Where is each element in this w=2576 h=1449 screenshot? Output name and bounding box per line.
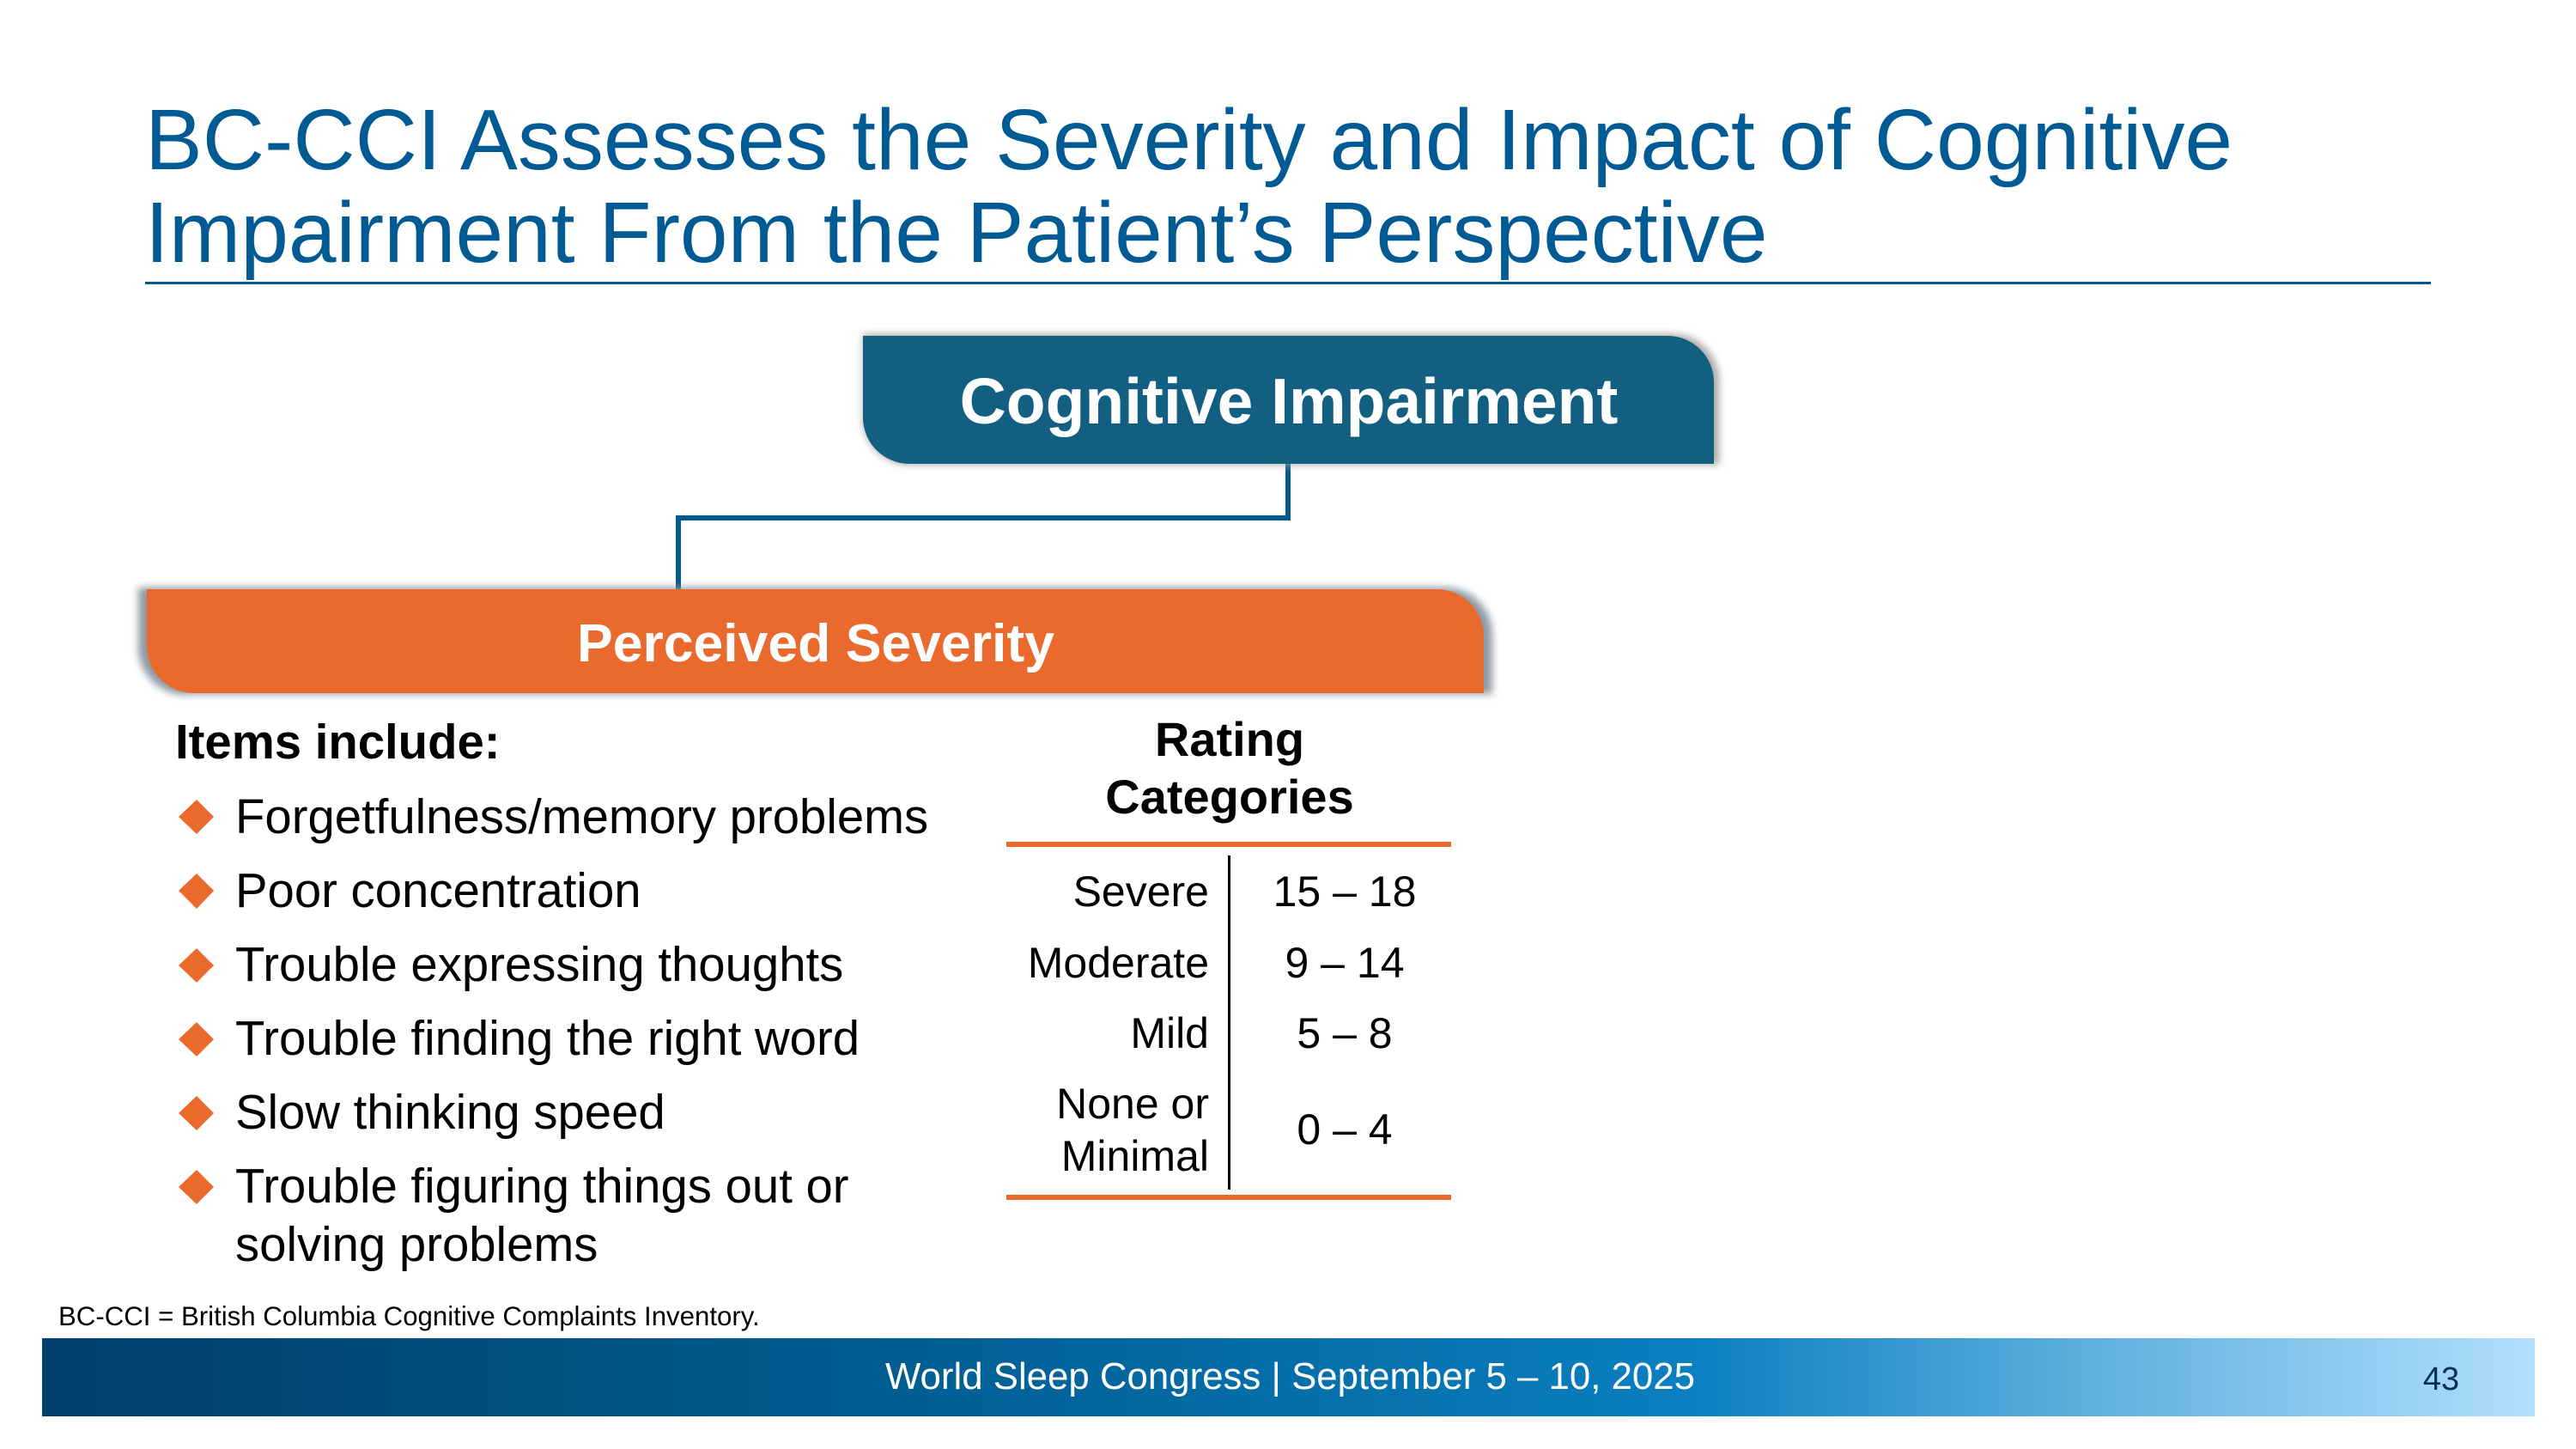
table score ranges: 15 – 18: [1273, 868, 1416, 916]
title: BC-CCI Assesses the Severity and Impact of Cognitive: [145, 92, 2233, 188]
box: Perceived Severity: [138, 588, 1492, 695]
box: Cognitive Impairment: [863, 334, 1719, 465]
rating categories table: [1006, 712, 1451, 1200]
title underline: [145, 282, 2431, 284]
table category labels: Minimal: [1061, 1132, 1209, 1180]
item: solving problems: solving problems: [235, 1217, 598, 1271]
table heading: Categories: [1105, 770, 1354, 824]
item: solving problems: Trouble figuring things out or: [235, 1159, 849, 1213]
footnote: BC-CCI = British Columbia Cognitive Complaints Inventory.: [58, 1301, 760, 1331]
connector: cognitive impairment to perceived severity: [678, 464, 1288, 590]
items list: [175, 715, 928, 1271]
table heading: [1105, 712, 1354, 824]
table score ranges: 9 – 14: [1285, 939, 1405, 987]
item: finding word: Trouble finding the right word: [235, 1011, 860, 1065]
title: Impairment From the Patient’s Perspective: [145, 185, 1768, 281]
box: Cognitive Impairment: Cognitive Impairment: [960, 365, 1618, 437]
footer bar: [42, 1338, 2535, 1416]
box: Perceived Severity: Perceived Severity: [577, 613, 1054, 673]
footer conference text: World Sleep Congress | September 5 – 10, 2025: [885, 1355, 1695, 1397]
title: [145, 92, 2233, 281]
table score ranges: 0 – 4: [1297, 1105, 1393, 1154]
table category labels: Mild: [1130, 1009, 1209, 1057]
table score ranges: [1273, 868, 1416, 1154]
table category labels: None or: [1056, 1080, 1209, 1128]
table heading: Rating: [1155, 712, 1304, 766]
page number: 43: [2423, 1361, 2459, 1397]
table rules: [1006, 842, 1451, 1200]
items heading: Items include:: [175, 715, 501, 769]
item: expressing thoughts: Trouble expressing thoughts: [235, 937, 843, 991]
item: thinking speed: Slow thinking speed: [235, 1085, 665, 1139]
table category labels: Severe: [1073, 868, 1209, 916]
item: forgetfulness: Forgetfulness/memory problems: [235, 789, 928, 843]
item: solving problems: [179, 1159, 849, 1271]
table category labels: Moderate: [1028, 939, 1209, 987]
table score ranges: 5 – 8: [1297, 1009, 1393, 1057]
item: concentration: Poor concentration: [235, 863, 641, 917]
table category labels: [1028, 868, 1209, 1180]
